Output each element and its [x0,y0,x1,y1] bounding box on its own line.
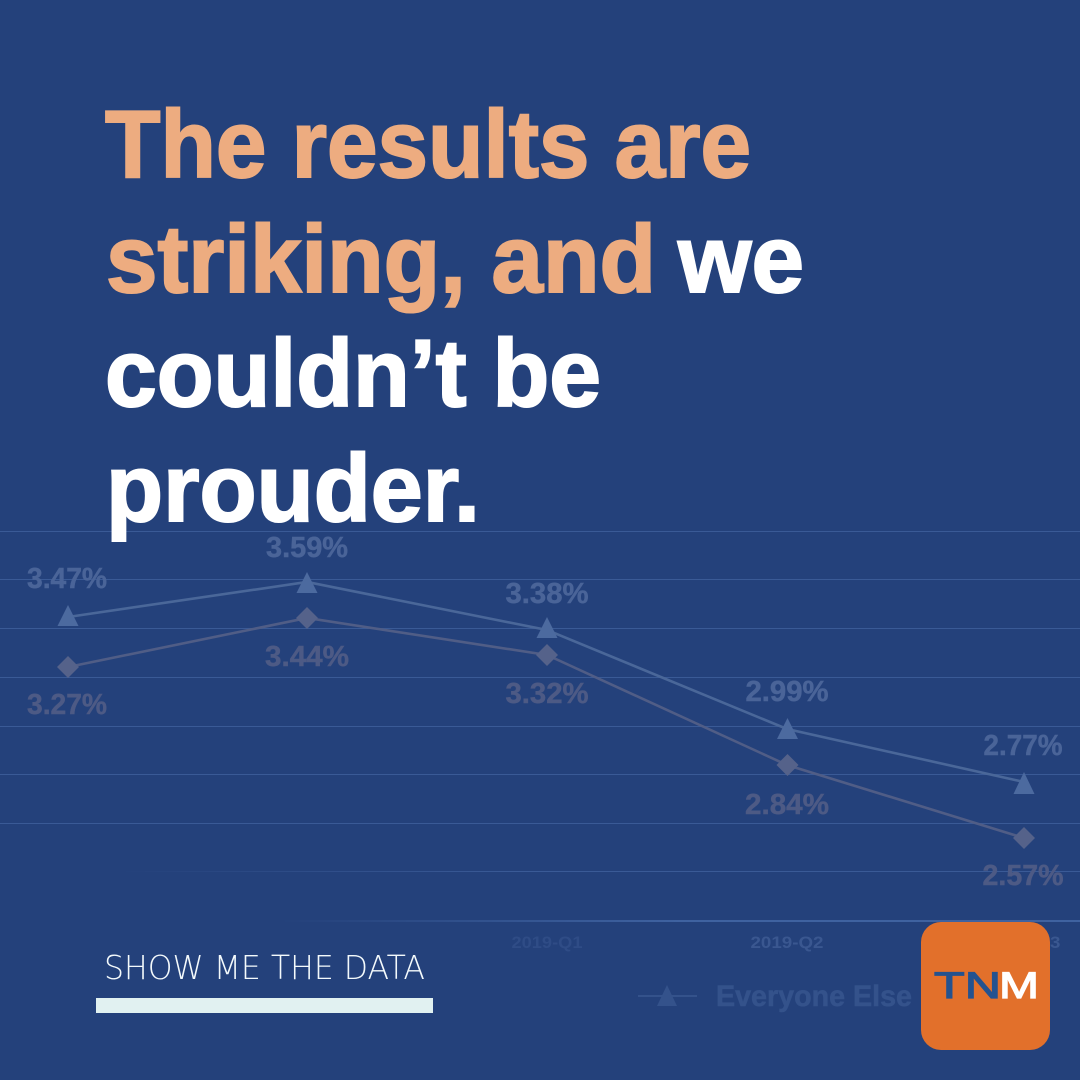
headline [105,91,804,542]
headline: couldn’t be [105,320,601,427]
value labels: comparison: 2.84% [745,789,829,821]
value labels: everyone else: 3.59% [266,532,348,564]
logo: TNM: TN [934,964,1001,1006]
value labels: comparison: 3.27% [27,689,107,721]
logo: TNM [921,922,1050,1050]
call to action underline bar [96,998,433,1013]
headline: striking, and [106,206,656,313]
legend: everyone else: Everyone Else [716,980,912,1013]
headline: we [677,206,804,313]
line chart (faded background) [0,531,1080,1013]
value labels: everyone else: 2.99% [746,676,829,708]
value labels: everyone else [27,532,1063,762]
headline: prouder. [106,435,480,542]
value labels: comparison: 3.32% [506,678,589,710]
x-axis labels [512,933,1060,952]
call to action: show me the data [96,948,433,1013]
series: comparison line [57,607,1035,849]
x-axis labels: 2019-Q3 [988,933,1060,952]
value labels: everyone else: 2.77% [984,730,1063,762]
call to action: show me the data: SHOW ME THE DATA [104,948,425,987]
value labels: comparison: 3.44% [265,641,349,673]
x-axis labels: 2019-Q1 [512,933,582,952]
value labels: comparison: 2.57% [982,860,1064,892]
logo: TNM: M [999,964,1039,1006]
headline: The results are [105,91,751,198]
x-axis labels: 2019-Q2 [750,933,824,952]
value labels: everyone else: 3.47% [27,563,107,595]
legend: everyone else [638,980,912,1013]
value labels: everyone else: 3.38% [506,578,589,610]
value labels: comparison [27,641,1064,892]
series: everyone else line [58,572,1034,794]
